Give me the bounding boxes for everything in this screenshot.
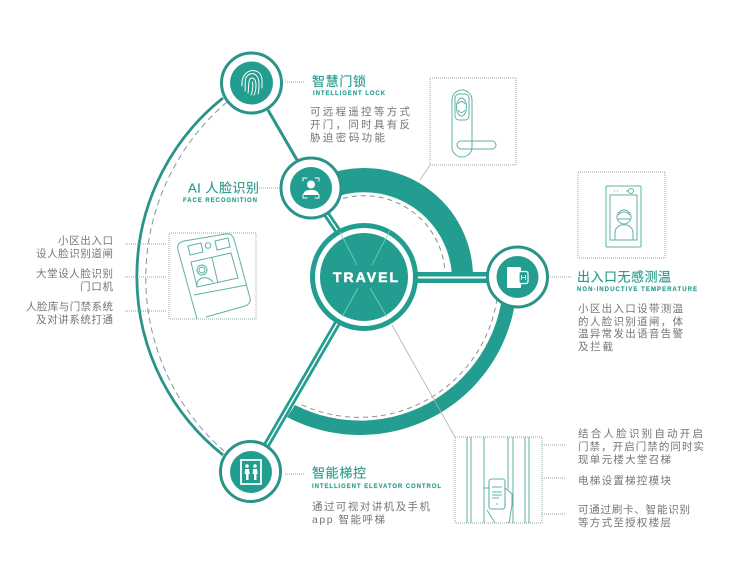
- node: face recognition: [281, 158, 341, 218]
- panel: elevator illustration: [455, 437, 542, 523]
- panel: face terminal illustration: [169, 233, 256, 319]
- pointer to lock panel: [420, 165, 430, 180]
- description: app 智能呼梯: [312, 513, 385, 526]
- leader: [285, 81, 305, 83]
- block: left feature list: 门口机: [80, 280, 114, 293]
- pointer to elevator panel: [392, 325, 455, 437]
- description: 小区出入口设带测温: [578, 302, 684, 315]
- heading: 智慧门锁: [312, 74, 366, 89]
- icon: fingerprint: [242, 71, 262, 95]
- node: elevator: [220, 442, 280, 502]
- block: left feature list: 人脸库与门禁系统: [26, 300, 114, 313]
- connector: face to centre: [325, 212, 342, 237]
- block: left feature list: [26, 234, 167, 326]
- block: left feature list: 设人脸识别道闸: [36, 247, 113, 260]
- description: 开门，同时具有反: [310, 118, 410, 131]
- description: 及拦截: [578, 340, 614, 353]
- block: face recognition text: [183, 180, 280, 204]
- description: 通过可视对讲机及手机: [312, 500, 430, 513]
- block: temperature text: [550, 270, 697, 353]
- description: 的人脸识别道闸，体: [578, 315, 684, 328]
- block: left feature list: 小区出入口: [58, 234, 113, 247]
- left dashed arc: [146, 102, 227, 452]
- subheading: NON-INDUCTIVE TEMPERATURE: [577, 287, 697, 293]
- block: elevator feature list: 电梯设置梯控模块: [578, 474, 672, 487]
- block: smart lock text: [285, 74, 410, 144]
- connector: centre to temperature: [415, 272, 490, 283]
- connector: centre to elevator: [266, 322, 338, 446]
- icon: door with sensor: [507, 267, 528, 288]
- subheading: FACE RECOGNITION: [183, 198, 257, 204]
- block: elevator feature list: 可通过刷卡、智能识别: [578, 503, 690, 516]
- heading: 出入口无感测温: [577, 270, 671, 284]
- description: 可远程遥控等方式: [310, 105, 410, 118]
- hub label: TRAVEL: [333, 269, 398, 285]
- block: elevator control text: [285, 466, 441, 526]
- centre hub: [312, 226, 416, 328]
- block: elevator feature list: 结合人脸识别自动开启: [578, 427, 703, 440]
- block: left feature list: 及对讲系统打通: [36, 313, 114, 326]
- upper thick arc: [311, 168, 473, 277]
- panel: temperature terminal illustration: [578, 172, 665, 258]
- heading: 智能梯控: [312, 466, 366, 480]
- description: 温异常发出语音告警: [578, 327, 684, 340]
- leader: [285, 473, 305, 475]
- block: elevator feature list: 现单元楼大堂召梯: [578, 453, 671, 466]
- description: [578, 302, 684, 353]
- block: elevator feature list: 门禁，开启门禁的同时实: [578, 440, 704, 453]
- icon: face scan: [303, 178, 319, 198]
- block: left feature list: 大堂设人脸识别: [36, 267, 113, 280]
- icon: elevator doors: [241, 460, 261, 484]
- subheading: INTELLIGENT LOCK: [313, 91, 386, 97]
- node: smart lock: [222, 53, 282, 113]
- block: elevator feature list: [542, 427, 704, 529]
- left outer arc: [137, 98, 223, 455]
- leader: [259, 187, 280, 189]
- lower dashed arc: [298, 290, 498, 417]
- leader: [550, 276, 571, 278]
- upper dashed arc: [343, 196, 445, 272]
- description: [310, 105, 410, 144]
- description: 胁迫密码功能: [310, 131, 386, 144]
- heading: AI 人脸识别: [188, 180, 259, 196]
- node: temperature: [488, 247, 548, 307]
- subheading: INTELLIGENT ELEVATOR CONTROL: [312, 484, 441, 490]
- panel: lock illustration: [430, 78, 516, 165]
- block: elevator feature list: 等方式至授权楼层: [578, 516, 671, 529]
- description: [312, 500, 430, 526]
- lower thick arc: [287, 278, 517, 435]
- connector: lock to face: [268, 110, 297, 160]
